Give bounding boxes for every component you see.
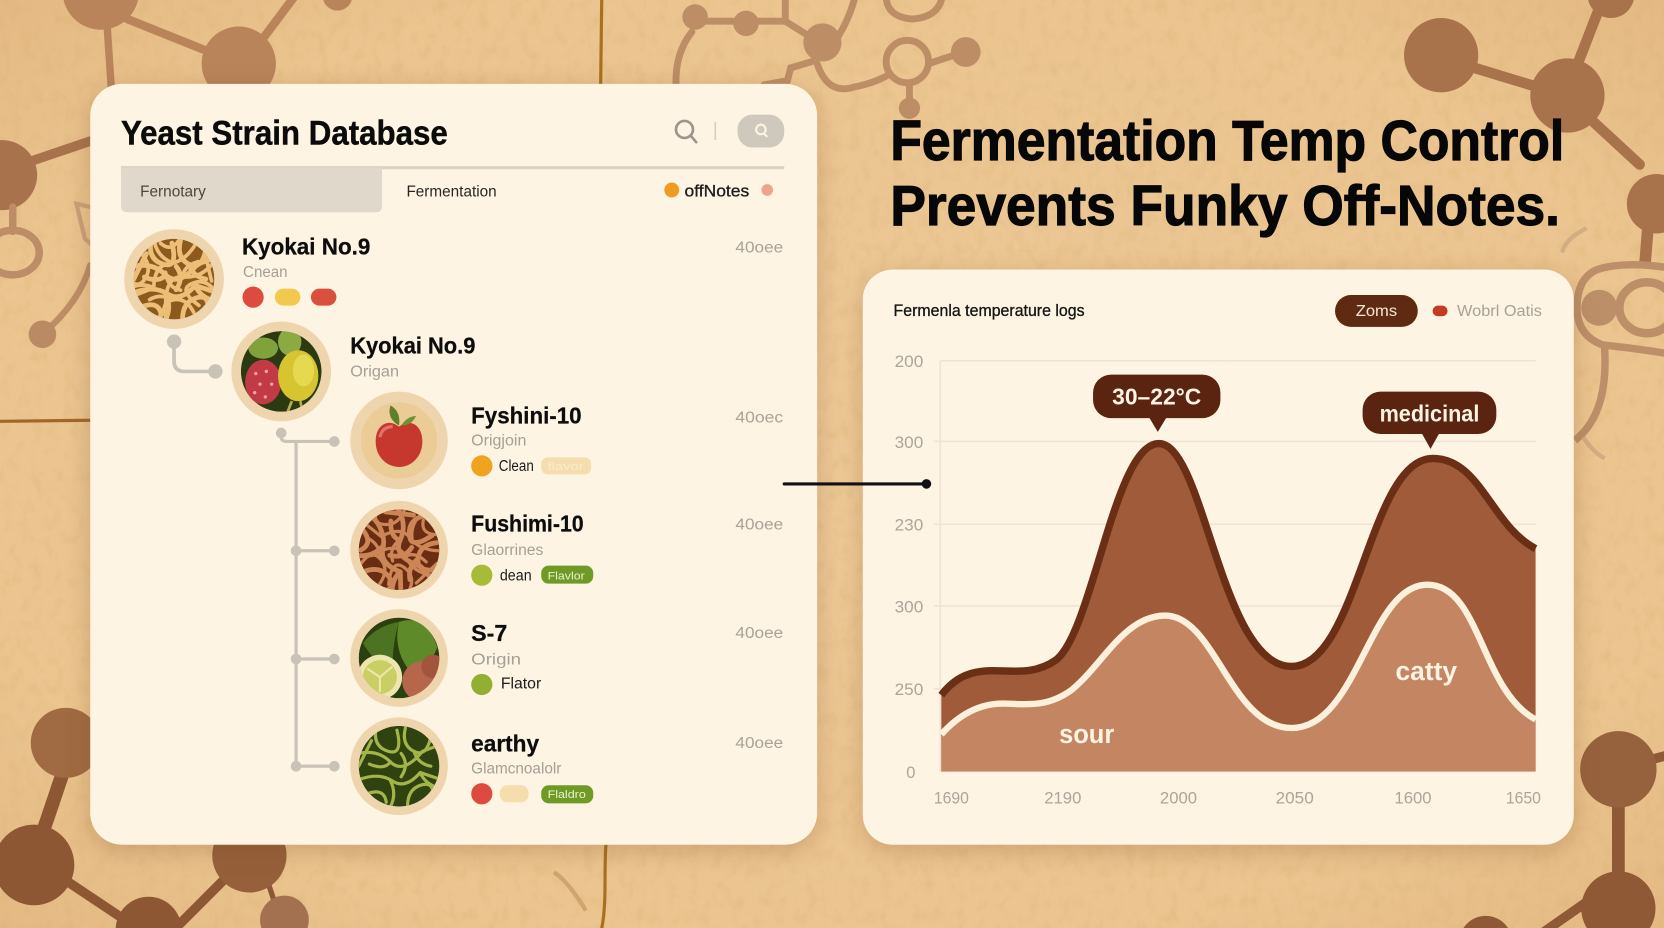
tab bar: Fermentation [406,183,497,200]
search button [715,115,784,148]
zoom pill [1335,295,1418,327]
x axis labels: 1690 [934,789,969,807]
area: upper dark series [941,444,1536,772]
strain row: Fyshini-10: Fyshini-10 [471,402,582,428]
legend: Wobrl Oatis [1457,303,1542,320]
strain row: Fyshini-10: Clean [499,458,534,475]
zoom pill: Zoms [1356,303,1397,320]
molecule: top left [63,0,352,101]
panel title: Yeast Strain Database [121,114,448,152]
molecule: left edge [0,140,93,348]
strain row: Fyshini-10: 40oec [735,409,783,426]
strain row: earthy [350,717,783,815]
icon: search [676,121,696,142]
strain row: S-7 [350,609,783,707]
x axis labels: 2050 [1276,789,1314,807]
strain row: Fyshini-10: Origjoin [471,433,526,450]
line: upper series [941,444,1536,695]
strain row: earthy: earthy [471,730,539,756]
panel shadows [90,89,1574,851]
strain row: Kyokai No.9 second: Kyokai No.9 [350,332,475,358]
y axis labels: 200 [895,353,923,371]
strain row: S-7: 40oee [735,625,783,642]
label: catty: catty [1396,658,1458,686]
strain row: earthy: 40oee [735,735,783,752]
molecule: top centre [676,0,981,119]
molecule: right edge ring [1562,228,1664,458]
strain row: Fushimi-10: Flavlor [548,570,585,582]
strain row: Kyokai No.9 second: Origan [350,364,399,381]
callout: medicinal: medicinal [1380,400,1479,426]
area chart [941,444,1536,772]
strain row: Kyokai No.9 [124,229,782,329]
y axis labels: 250 [895,681,923,699]
strain row: S-7: Origin [471,651,521,668]
molecule: bottom left [0,708,309,928]
strain row: Fyshini-10 [350,392,783,489]
chart title: Fermenla temperature logs [894,302,1085,320]
tab bar [121,168,784,212]
callout: 30-22C: 30–22°C [1112,383,1201,409]
area: lower light series [941,585,1536,772]
x axis labels: 1650 [1506,789,1541,807]
line: lower series [941,585,1536,734]
y axis labels: 300 [895,434,923,452]
callout: 30-22C [1093,375,1220,432]
strain row: Kyokai No.9 second [231,322,475,421]
x axis labels: 2190 [1044,789,1081,807]
strain row: earthy: Glamcnoalolr [471,761,562,778]
strain row: Fushimi-10 [347,498,783,601]
y axis labels [895,353,923,782]
y axis labels: 230 [895,517,923,535]
strain row: Kyokai No.9: 40oee [735,240,783,257]
strain row: Fushimi-10: Fushimi-10 [471,511,584,537]
panel: temperature chart [863,270,1574,845]
connector: Kyokai to Kyokai [169,336,221,377]
strain row: Kyokai No.9: Kyokai No.9 [242,234,370,260]
strain row: Fushimi-10: 40oee [735,517,783,534]
x axis labels [934,789,1541,807]
headline: Fermentation Temp Control [890,109,1564,172]
molecule: top right [1404,0,1664,265]
tab bar: offNotes [684,181,749,200]
strain row: S-7: S-7 [471,620,507,646]
molecule: bottom right [1459,731,1664,928]
tab bar: Fernotary [140,183,206,200]
connector tree [276,428,340,772]
headline: Prevents Funky Off-Notes. [890,174,1560,237]
callout: medicinal [1363,392,1496,449]
strain row: Fyshini-10: flavor [548,461,584,473]
x axis labels: 2000 [1160,789,1197,807]
strain row: earthy: Flaldro [548,789,586,801]
strain row: Fushimi-10: dean [500,567,532,584]
arrow: connector from database to chart [784,479,931,489]
y axis labels: 300 [895,598,923,616]
y axis labels: 0 [906,764,915,782]
strain row: S-7: Flator [501,676,542,693]
headline [890,109,1564,237]
x axis labels: 1600 [1394,789,1432,807]
strain row: Fushimi-10: Glaorrines [471,542,543,559]
strain row: Kyokai No.9: Cnean [243,264,288,281]
label: sour: sour [1059,721,1114,749]
panel: yeast strain database [90,84,817,845]
